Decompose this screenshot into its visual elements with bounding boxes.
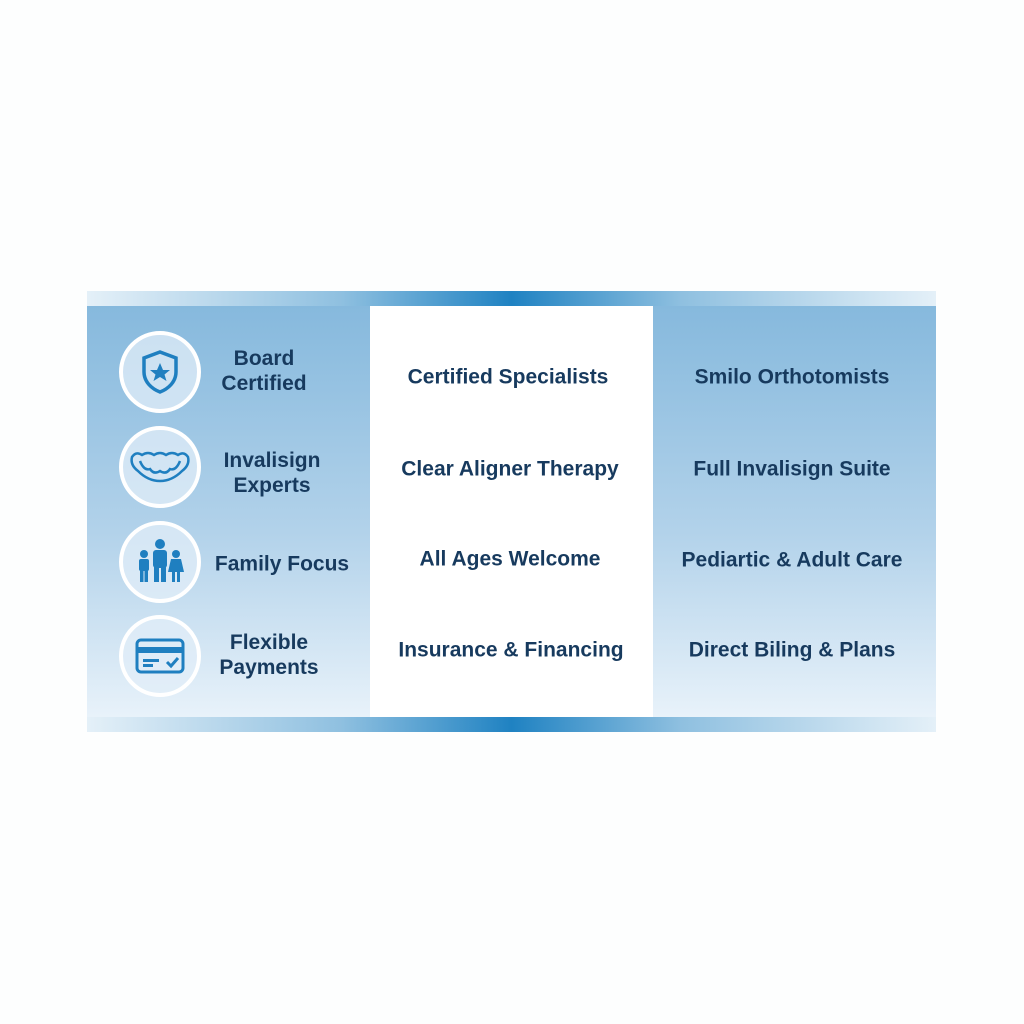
icon: aligner — [119, 426, 201, 508]
text: Certified Specialists: Certified Specialists — [408, 366, 608, 388]
text: Flexible Payments: Flexible — [230, 631, 308, 654]
icon: family — [119, 521, 201, 603]
text: Invalisign Experts: Invalisign — [224, 449, 320, 472]
text: Full Invalisign Suite: Full Invalisign Suite — [693, 458, 891, 480]
top bar — [87, 291, 936, 306]
bottom bar — [87, 717, 936, 732]
icon: shield — [119, 331, 201, 413]
text: Board Certified: Certified — [221, 372, 307, 395]
icon: card — [119, 615, 201, 697]
panel: middle — [370, 306, 653, 717]
text: Invalisign Experts — [224, 449, 320, 497]
text: Board Certified — [221, 347, 307, 395]
text: Clear Aligner Therapy: Clear Aligner Therapy — [401, 458, 619, 480]
text: Smilo Orthotomists: Smilo Orthotomists — [695, 366, 889, 388]
text: Board Certified: Board — [234, 347, 294, 370]
text: Family Focus: Family Focus — [215, 552, 349, 576]
panel: left features — [87, 306, 370, 717]
text: Flexible Payments: Payments — [219, 656, 319, 679]
text: Pediartic & Adult Care: Pediartic & Adult Care — [682, 548, 902, 572]
text: Insurance & Financing: Insurance & Financing — [398, 638, 624, 662]
text: Flexible Payments — [219, 631, 319, 679]
text: All Ages Welcome: All Ages Welcome — [420, 548, 600, 570]
text: Direct Biling & Plans: Direct Biling & Plans — [689, 638, 895, 662]
text: Invalisign Experts: Experts — [233, 474, 311, 497]
panel: right — [653, 306, 936, 717]
